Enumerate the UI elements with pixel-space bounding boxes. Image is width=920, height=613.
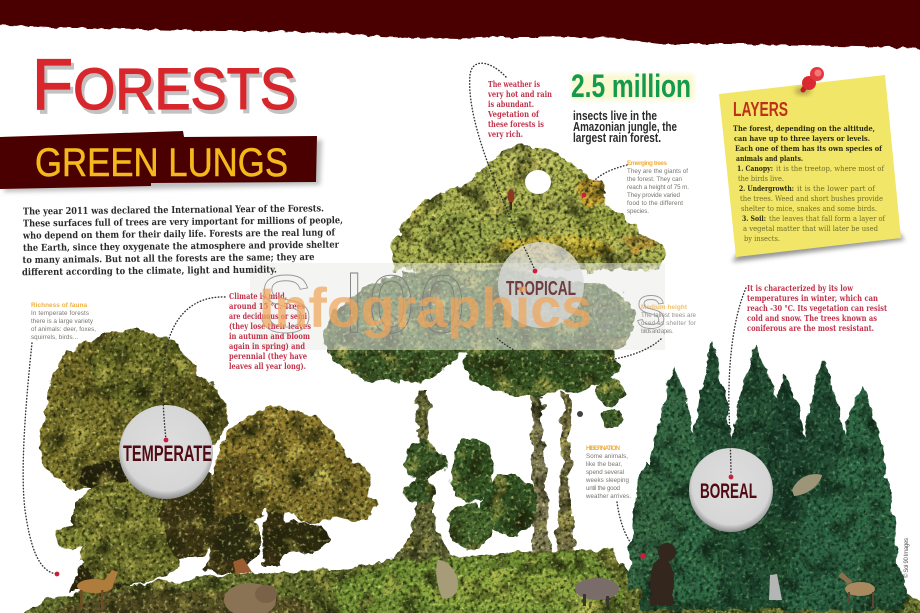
text: temperate climate: again in spring) and bbox=[229, 341, 305, 351]
badge: boreal bbox=[689, 448, 773, 532]
push pin bbox=[795, 67, 824, 95]
sticky note: layers: it is the treetop, where most of bbox=[776, 164, 885, 173]
text: boreal climate: cold and snow. The trees known as bbox=[747, 313, 877, 323]
note: hibernation: HIBERNATION bbox=[586, 445, 620, 452]
badge: boreal: BOREAL bbox=[700, 480, 757, 503]
sticky note: layers: a vegetal matter that will later be used bbox=[743, 224, 878, 233]
text: temperate climate bbox=[229, 291, 311, 371]
sticky note: layers: 1. Canopy: bbox=[737, 164, 773, 173]
note: emerging trees: reach a height of 75 m. bbox=[627, 184, 689, 191]
intro paragraph: to many animals. But not all the forests are the same; they are bbox=[22, 252, 315, 266]
sticky note: layers: 3. Soil: bbox=[742, 214, 766, 223]
sticky note: layers: by insects. bbox=[744, 234, 780, 243]
intro paragraph: who depend on them for their daily life. Forests are the real lung of bbox=[22, 227, 336, 242]
note: hibernation bbox=[585, 445, 631, 500]
text: tropical weather: very rich. bbox=[487, 129, 523, 139]
stat: 2.5 million insects: insects live in the bbox=[573, 108, 657, 123]
note: emerging trees: They provide varied bbox=[627, 192, 681, 199]
torn top banner bbox=[0, 0, 920, 49]
watermark bbox=[258, 259, 666, 350]
text: temperate climate: (they lose their leaves bbox=[229, 321, 311, 331]
sticky note: layers: it is the lower part of bbox=[797, 184, 876, 193]
title: Forests: FORESTS bbox=[35, 49, 299, 129]
note: emerging trees: They are the giants of bbox=[627, 168, 688, 175]
note: hibernation: spend several bbox=[586, 469, 624, 476]
tree: temperate forest bbox=[39, 330, 378, 590]
note: maximum height: used as shelter for bbox=[641, 320, 696, 327]
note: richness of fauna: Richness of fauna bbox=[31, 302, 87, 309]
animal: tapir bbox=[575, 578, 619, 606]
intro paragraph bbox=[22, 203, 343, 278]
text: tropical weather: very hot and rain bbox=[487, 89, 552, 99]
text: temperate climate: are deciduous or semi bbox=[229, 311, 307, 321]
note: hibernation: weeks sleeping bbox=[585, 477, 630, 484]
text: boreal climate: coniferous are the most resistant. bbox=[747, 323, 874, 333]
sticky note: layers: shelter to mice, snakes and some birds. bbox=[741, 204, 877, 213]
animal: small bird bbox=[577, 411, 583, 417]
watermark: Infographics bbox=[259, 276, 592, 339]
note: emerging trees: food to the different bbox=[627, 200, 683, 207]
sticky note: layers: The forest, depending on the altitude, bbox=[733, 124, 875, 133]
note: emerging trees: the forest. They can bbox=[627, 176, 683, 183]
tree: tropical forest bbox=[325, 146, 667, 562]
watermark: S bbox=[258, 259, 313, 350]
animal: bird in canopy bbox=[508, 189, 514, 210]
badge: temperate bbox=[119, 405, 213, 499]
animal: tree lynx bbox=[792, 474, 822, 496]
animal: deer bbox=[77, 570, 118, 610]
note: hibernation: like the bear, bbox=[586, 461, 622, 468]
badge: tropical bbox=[498, 242, 584, 328]
note: maximum height: Medium height bbox=[641, 304, 688, 311]
title: Forests: FORESTS bbox=[32, 45, 296, 125]
note: emerging trees: species. bbox=[627, 208, 649, 215]
subtitle banner: Green Lungs: GREEN LUNGS bbox=[35, 141, 288, 185]
sticky note: layers: the leaves that fall form a layer of bbox=[769, 214, 886, 223]
watermark: l00 bbox=[345, 259, 465, 350]
note: richness of fauna: In temperate forests bbox=[31, 310, 89, 317]
text: temperate climate: leaves all year long). bbox=[229, 361, 306, 371]
note: hibernation: Some animals, bbox=[586, 453, 628, 460]
note: richness of fauna: of animals: deer, foxes, bbox=[31, 326, 96, 333]
note: maximum height: birds and apes. bbox=[641, 328, 673, 335]
gap in tropical canopy bbox=[525, 170, 551, 194]
text: boreal climate bbox=[747, 283, 887, 333]
trees: boreal forest bbox=[628, 340, 910, 610]
text: tropical weather: The weather is bbox=[488, 79, 540, 89]
sticky note: layers: 2. Undergrowth: bbox=[739, 184, 794, 193]
text: tropical weather: is abundant. bbox=[488, 99, 534, 109]
forest ground bbox=[15, 550, 920, 613]
sticky note: layers: LAYERS bbox=[733, 99, 788, 121]
animal: fox bbox=[233, 558, 252, 574]
note: richness of fauna bbox=[31, 302, 96, 341]
text: boreal climate: It is characterized by its low bbox=[747, 283, 854, 293]
note: hibernation: weather arrives. bbox=[585, 493, 631, 500]
sticky note: layers: Each one of them has its own species of bbox=[735, 144, 883, 153]
note: maximum height bbox=[641, 304, 697, 335]
note: richness of fauna: there is a large variety bbox=[31, 318, 94, 325]
photo credit: © Sol 90 Images bbox=[903, 538, 910, 578]
sticky note: layers bbox=[719, 67, 905, 262]
intro paragraph: the Earth, since they oxygenate the atmosphere and provide shelter bbox=[23, 240, 340, 254]
sticky note: layers: the trees. Weed and short bushes provide bbox=[740, 194, 883, 203]
stat: 2.5 million insects: largest rain forest. bbox=[573, 130, 661, 145]
text: temperate climate: around 15 °C. Trees bbox=[229, 301, 305, 311]
watermark wash bbox=[250, 263, 665, 350]
watermark: es bbox=[590, 274, 666, 341]
animal: elk bbox=[838, 572, 875, 608]
note: maximum height: The tallest trees are bbox=[641, 312, 697, 319]
text: boreal climate: temperatures in winter, which can bbox=[747, 293, 878, 303]
text: tropical weather: these forests is bbox=[488, 119, 544, 129]
stat: 2.5 million insects bbox=[571, 68, 694, 145]
text: temperate climate: Climate is mild, bbox=[229, 291, 287, 301]
badge: tropical: TROPICAL bbox=[506, 278, 576, 300]
text: temperate climate: perennial (they have bbox=[229, 351, 307, 361]
sticky note: layers: the birds live. bbox=[738, 174, 784, 183]
intro paragraph: The year 2011 was declared the International Year of the Forests. bbox=[23, 203, 324, 217]
intro paragraph: These surfaces full of trees are very important for millions of people, bbox=[23, 215, 343, 229]
note: richness of fauna: squirrels, birds... bbox=[31, 334, 78, 341]
stat: 2.5 million insects: 2.5 million bbox=[571, 68, 691, 104]
intro paragraph: different according to the climate, light and humidity. bbox=[22, 265, 277, 278]
sticky note: layers: animals and plants. bbox=[736, 154, 803, 163]
subtitle banner: Green Lungs bbox=[0, 131, 322, 192]
animal: black bear bbox=[650, 543, 676, 606]
dotted leader lines bbox=[23, 63, 746, 574]
leader end dots bbox=[55, 193, 733, 576]
badge: temperate: TEMPERATE bbox=[123, 441, 212, 466]
note: emerging trees bbox=[627, 160, 689, 215]
animal: wolf bbox=[769, 574, 782, 600]
text: temperate climate: in autumn and bloom bbox=[229, 331, 310, 341]
text: tropical weather bbox=[487, 79, 552, 139]
stat: 2.5 million insects: Amazonian jungle, the bbox=[573, 119, 677, 134]
animal: lynx bbox=[436, 560, 458, 598]
note: emerging trees: Emerging trees bbox=[627, 160, 667, 167]
text: tropical weather: Vegetation of bbox=[487, 109, 539, 119]
sticky note: layers: can have up to three layers or levels. bbox=[734, 134, 870, 143]
text: boreal climate: reach -30 °C. Its vegetation can resist bbox=[747, 303, 887, 313]
note: hibernation: until the good bbox=[586, 485, 621, 492]
animal: brown bear bbox=[224, 583, 277, 613]
